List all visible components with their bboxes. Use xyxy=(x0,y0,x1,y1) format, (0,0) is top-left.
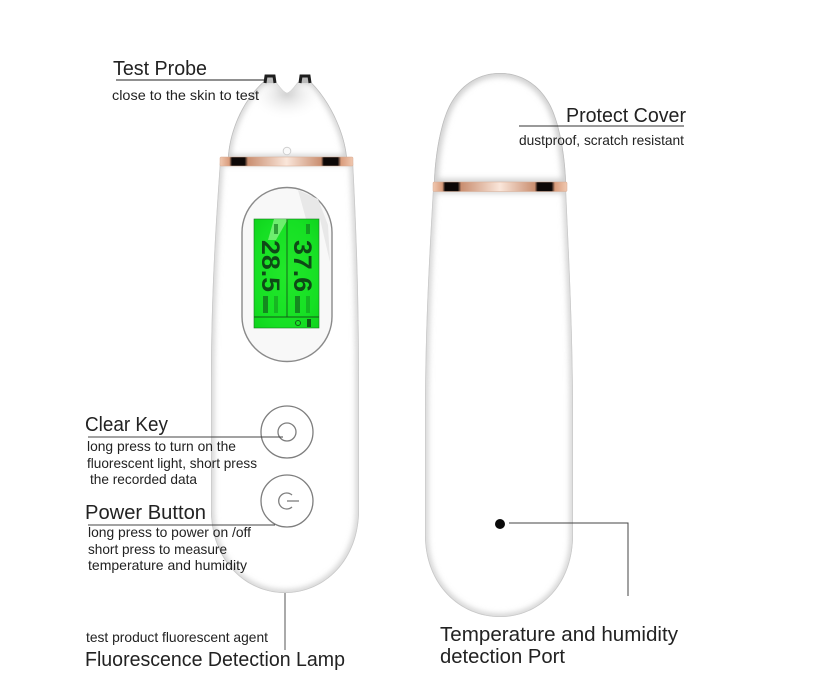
callout: clear key: long press to turn on the xyxy=(87,438,236,454)
callout: temperature and humidity port xyxy=(440,523,678,668)
callout: power button: Power Button xyxy=(85,502,206,524)
LCD screen xyxy=(254,219,319,328)
callout: fluorescence detection lamp: test product fluorescent agent xyxy=(86,629,268,645)
callout: clear key: the recorded data xyxy=(90,471,197,487)
callout: fluorescence detection lamp xyxy=(85,593,345,671)
callout: clear key: fluorescent light, short press xyxy=(87,455,257,471)
LCD screen: 37.6 xyxy=(288,240,316,292)
display bezel xyxy=(242,188,332,362)
callout: temperature and humidity port: detection Port xyxy=(440,646,565,668)
callout: test probe xyxy=(112,58,264,103)
device body xyxy=(211,162,359,593)
bezel reflection xyxy=(298,190,330,262)
device: protective cover view xyxy=(425,73,573,617)
callout: protect cover: Protect Cover xyxy=(566,105,686,127)
callout: fluorescence detection lamp: Fluorescence Detection Lamp xyxy=(85,649,345,671)
callout: test probe: Test Probe xyxy=(113,58,207,80)
callout: power button xyxy=(85,502,275,573)
cover dome xyxy=(434,73,566,183)
sensor hole xyxy=(283,147,291,155)
LCD readings: 28.5 xyxy=(256,240,284,292)
icon: test probes xyxy=(265,76,310,83)
callout: power button: short press to measure xyxy=(88,541,227,557)
LCD small indicators xyxy=(263,224,311,327)
callout: protect cover: dustproof, scratch resistant xyxy=(519,132,684,148)
rose gold ring xyxy=(220,157,353,166)
callout: test probe: close to the skin to test xyxy=(112,87,259,103)
callout: clear key: Clear Key xyxy=(85,414,168,436)
callout: protect cover xyxy=(519,105,686,148)
device head xyxy=(228,81,347,158)
power button xyxy=(261,475,313,527)
clear key button xyxy=(261,406,313,458)
device: front view xyxy=(211,76,359,593)
port dot xyxy=(495,519,505,529)
callout: clear key xyxy=(85,414,283,487)
callout: temperature and humidity port: Temperature and humidity xyxy=(440,624,678,646)
cover ring xyxy=(433,182,567,192)
cover body xyxy=(425,190,573,617)
callout: power button: long press to power on /off xyxy=(88,524,251,540)
callout: power button: temperature and humidity xyxy=(88,557,247,573)
